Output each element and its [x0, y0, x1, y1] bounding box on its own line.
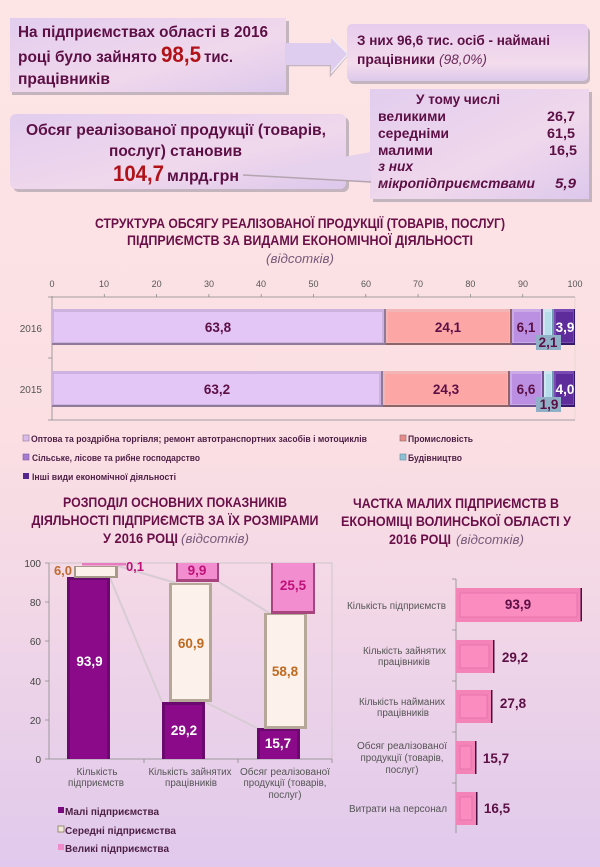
legend: activities [23, 434, 473, 483]
column: enterprises [54, 559, 144, 759]
title: revenue structure [95, 215, 505, 266]
y axis labels: 40 [30, 677, 41, 688]
bar: hired: Кількість найманих [359, 697, 445, 708]
panel: employed workers: На підприємствах області в 2016 [18, 24, 268, 41]
legend: activities: Оптова та роздрібна торгівля; ремонт автотранспортних засобів і мотоциклів [31, 434, 367, 445]
column: revenue: 25,5 [280, 578, 307, 593]
arrow: employed to hired [285, 37, 348, 74]
category labels: працівників [165, 778, 217, 789]
y axis labels: 80 [30, 598, 41, 609]
panel: by enterprise size: У тому числі [416, 91, 500, 107]
panel: by enterprise size: 5,9 [555, 175, 576, 191]
title: distribution by size [32, 494, 318, 546]
axis labels: 0 [49, 279, 55, 289]
bars 2015: 1,9 [540, 397, 558, 412]
legend: activities: Сільське, лісове та рибне господарство [32, 453, 200, 464]
axis labels: 50 [308, 279, 319, 289]
column: enterprises: 6,0 [54, 563, 72, 578]
title: revenue structure: ПІДПРИЄМСТВ ЗА ВИДАМИ ЕКОНОМІЧНОЇ ДІЯЛЬНОСТІ [127, 232, 473, 248]
y axis labels: 60 [30, 637, 41, 648]
legend: enterprise size: Великі підприємства [65, 843, 169, 855]
axis labels: 2016 [20, 324, 42, 335]
bars 2015 [52, 371, 575, 412]
bars 2015: 4,0 [556, 382, 574, 397]
panel: by enterprise size: великими [378, 108, 446, 124]
bar: revenue: 15,7 [483, 751, 509, 766]
panel: revenue: млрд.грн [167, 168, 239, 185]
chart: distribution stacked columns [24, 559, 332, 801]
callout wedge [243, 152, 371, 182]
axis labels: 40 [256, 279, 266, 289]
y axis labels: 20 [30, 716, 41, 727]
legend: enterprise size [58, 806, 176, 855]
panel: hired workers: З них 96,6 тис. осіб - наймані [357, 32, 550, 48]
panel: hired workers [347, 24, 590, 84]
panel: hired workers: (98,0%) [439, 51, 487, 67]
legend: enterprise size: Малі підприємства [65, 806, 159, 818]
column: enterprises: 93,9 [76, 654, 103, 669]
title: revenue structure: СТРУКТУРА ОБСЯГУ РЕАЛІЗОВАНОЇ ПРОДУКЦІЇ (ТОВАРІВ, ПОСЛУГ) [95, 215, 505, 231]
panel: revenue: 104,7 [113, 161, 164, 186]
bars 2016 [52, 309, 575, 350]
panel: by enterprise size: з них [378, 158, 414, 174]
title: distribution by size: РОЗПОДІЛ ОСНОВНИХ ПОКАЗНИКІВ [63, 494, 287, 510]
column: enterprises: 0,1 [126, 559, 144, 574]
bar: employed: Кількість зайнятих [363, 646, 446, 657]
panel: by enterprise size [370, 89, 592, 202]
column: revenue [257, 563, 315, 759]
chart: revenue structure stacked bars [20, 279, 583, 420]
bar: enterprises: 93,9 [505, 597, 531, 612]
bars 2016: 6,1 [517, 320, 536, 335]
bar: personnel: Витрати на персонал [349, 804, 447, 815]
legend: activities: Промисловість [408, 434, 473, 445]
legend: activities: Інші види економічної діяльності [32, 472, 176, 483]
bars 2016: 3,9 [556, 320, 574, 335]
panel: by enterprise size: середніми [378, 125, 449, 141]
y axis labels [24, 559, 41, 766]
bar: employed [363, 640, 528, 673]
title: small enterprises share: (відсотків) [456, 533, 524, 547]
bar: revenue: послуг) [386, 765, 418, 776]
panel: revenue: Обсяг реалізованої продукції (товарів, [26, 122, 326, 139]
legend: enterprise size: Середні підприємства [65, 825, 176, 837]
panel: employed workers: працівників [18, 71, 110, 88]
bar: personnel: 16,5 [484, 801, 511, 816]
bar: revenue [357, 740, 509, 776]
panel: employed workers: році було зайнято [18, 49, 157, 66]
panel: by enterprise size: 26,7 [547, 108, 575, 124]
bars 2016: 24,1 [435, 320, 462, 335]
axis labels: 100 [567, 279, 583, 289]
bars 2015: 24,3 [433, 382, 460, 397]
bar: revenue: Обсяг реалізованої [357, 740, 447, 752]
category labels: послуг) [268, 790, 302, 801]
bars 2015: 63,2 [204, 382, 230, 397]
column: workers [162, 563, 219, 759]
category labels: підприємств [68, 778, 124, 789]
axis labels: 30 [204, 279, 214, 289]
title: distribution by size: У 2016 РОЦІ [103, 530, 178, 546]
panel: hired workers: працівники [357, 51, 435, 67]
bars 2016: 2,1 [539, 335, 558, 350]
axis labels: 20 [152, 279, 162, 289]
panel: employed workers: тис. [204, 49, 233, 66]
bar: hired: 27,8 [500, 696, 527, 711]
category labels: продукції (товарів, [244, 778, 326, 789]
connector lines [110, 566, 271, 728]
axis labels: 60 [361, 279, 371, 289]
bar: enterprises: Кількість підприємств [347, 601, 446, 612]
category labels [68, 766, 330, 801]
panel: employed workers: 98,5 [161, 42, 201, 67]
category labels: Кількість [76, 767, 118, 778]
title: small enterprises share: 2016 РОЦІ [389, 531, 451, 547]
bar: hired [359, 690, 527, 723]
bars 2016: 63,8 [205, 320, 232, 335]
bars 2015: 6,6 [517, 382, 536, 397]
category labels: Кількість зайнятих [148, 767, 232, 778]
axis labels: 80 [465, 279, 475, 289]
column: revenue: 58,8 [272, 664, 299, 679]
panel: employed workers [10, 18, 289, 95]
panel: by enterprise size: 16,5 [549, 142, 577, 158]
panel: by enterprise size: 61,5 [547, 125, 575, 141]
column: workers: 60,9 [178, 636, 204, 651]
y axis labels: 0 [35, 755, 41, 766]
column: revenue: 15,7 [265, 736, 291, 751]
title: distribution by size: (відсотків) [181, 532, 249, 546]
y axis labels: 100 [24, 559, 41, 570]
title: revenue structure: (відсотків) [266, 252, 334, 266]
bar: personnel [349, 792, 511, 825]
panel: revenue [10, 114, 349, 192]
bar: hired: працівників [377, 708, 429, 719]
bar: employed: 29,2 [502, 650, 528, 665]
axis labels [20, 279, 583, 396]
legend: activities: Будівництво [408, 453, 462, 464]
axis labels: 70 [413, 279, 423, 289]
title: distribution by size: ДІЯЛЬНОСТІ ПІДПРИЄМСТВ ЗА ЇХ РОЗМІРАМИ [32, 512, 318, 528]
panel: by enterprise size: малими [378, 142, 433, 158]
column: workers: 9,9 [188, 563, 206, 578]
column: workers: 29,2 [171, 723, 197, 738]
bar: employed: працівників [378, 657, 430, 668]
bar: enterprises [347, 588, 582, 622]
chart: small enterprises share bars [347, 579, 582, 833]
panel: revenue: послуг) становив [109, 143, 242, 160]
panel: by enterprise size: мікропідприємствами [378, 175, 535, 191]
title: small enterprises share [341, 495, 571, 547]
category labels: Обсяг реалізованої [240, 766, 330, 778]
title: small enterprises share: ЕКОНОМІЦІ ВОЛИНСЬКОЇ ОБЛАСТІ У [341, 513, 571, 529]
title: small enterprises share: ЧАСТКА МАЛИХ ПІДПРИЄМСТВ В [353, 495, 559, 511]
axis labels: 10 [99, 279, 109, 289]
bar: revenue: продукції (товарів, [360, 753, 444, 764]
axis labels: 90 [518, 279, 528, 289]
axis labels: 2015 [20, 385, 42, 396]
